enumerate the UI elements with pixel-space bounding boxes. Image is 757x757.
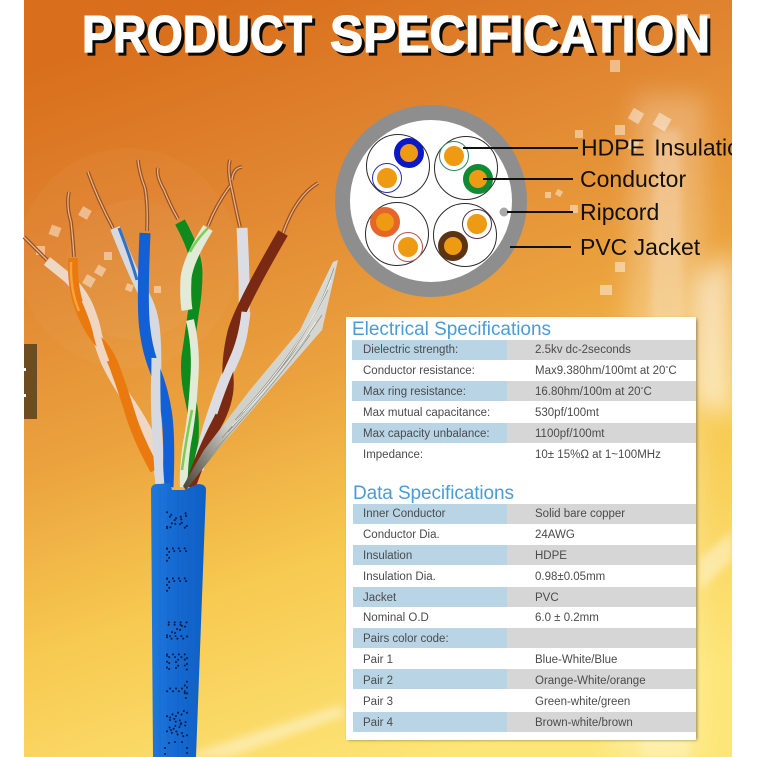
row: pair 1: Pair 1 [363, 654, 393, 666]
row: impedance: 10± 15%Ω at 1~100MHz [535, 449, 661, 461]
row: pair 1: Blue-White/Blue [535, 654, 617, 666]
panel: specifications [346, 317, 697, 740]
row: pair 2: Orange-White/orange [535, 675, 646, 687]
heading: data specifications: Data Specifications [353, 483, 514, 504]
pair 4 brown [434, 204, 496, 266]
row: conductor dia: 24AWG [535, 529, 575, 541]
row: dielectric strength [352, 340, 696, 360]
row: max mutual capacitance: Max mutual capacitance: [363, 407, 490, 419]
row: pair 1 [363, 654, 617, 666]
row: insulation dia: 0.98±0.05mm [535, 571, 605, 583]
row: pairs color code: Pairs color code: [363, 633, 449, 645]
callout: hdpe insulation: HDPE Insulation [581, 134, 753, 160]
row: max ring resistance: Max ring resistance: [363, 386, 466, 398]
row: inner conductor: Solid bare copper [535, 508, 625, 520]
row: conductor resistance: ° [665, 364, 668, 373]
dot matrix cable print: XLL NETW [160, 511, 192, 738]
pvc jacket ring [342, 112, 520, 290]
row: max capacity unbalance: Max capacity unbalance: [363, 428, 490, 440]
row: pair 3: Green-white/green [535, 696, 630, 708]
row: conductor dia: Conductor Dia. [363, 529, 440, 541]
row: inner conductor: Inner Conductor [363, 508, 446, 520]
white orange wire [47, 261, 161, 487]
blue wire [143, 233, 169, 487]
row: insulation dia [363, 571, 605, 583]
white brown wire [198, 228, 244, 470]
callout: pvc jacket: PVC Jacket [580, 234, 701, 260]
row: impedance [363, 449, 661, 461]
white blue overlap [156, 358, 160, 487]
row: impedance: Impedance: [363, 449, 423, 461]
row: conductor dia [363, 529, 575, 541]
row: insulation: HDPE [535, 550, 567, 562]
ripcord [500, 208, 508, 216]
row: pair 2: Pair 2 [363, 675, 393, 687]
white blue wire [115, 228, 161, 487]
callout: conductor: Conductor [580, 166, 686, 192]
side tab [24, 344, 37, 419]
row: max mutual capacitance: 530pf/100mt [535, 407, 600, 419]
copper conductor tips [24, 160, 318, 260]
row: insulation dia: Insulation Dia. [363, 571, 436, 583]
row: pair 2 [353, 669, 696, 689]
row: nominal od: 6.0 ± 0.2mm [535, 612, 599, 624]
brown wire [190, 233, 283, 487]
row: max capacity unbalance: 1100pf/100mt [535, 428, 605, 440]
pair 2 green [434, 136, 498, 200]
white green lower wire [184, 320, 195, 487]
row: inner conductor [353, 504, 696, 524]
cable illustration [24, 160, 338, 490]
title [82, 5, 710, 63]
orange stripe edge [154, 440, 163, 487]
row: dielectric strength: 2.5kv dc-2seconds [535, 344, 631, 356]
row: pair 3 [363, 696, 630, 708]
row: nominal od [363, 612, 599, 624]
blue stripe [119, 228, 137, 280]
row: nominal od: Nominal O.D [363, 612, 429, 624]
green wire [180, 222, 197, 487]
row: conductor resistance: Conductor resistance: [363, 365, 475, 377]
row: insulation [353, 545, 696, 565]
cut-off print dots [164, 741, 188, 755]
pair 1 blue [366, 134, 430, 198]
pair 3 orange [366, 202, 428, 266]
title: SPECIFICATION [330, 5, 710, 63]
row: pairs color code [353, 628, 696, 648]
orange wire [73, 258, 155, 470]
row: max ring resistance: C [644, 386, 652, 398]
row: conductor resistance [363, 364, 677, 377]
cross section diagram [342, 112, 520, 290]
green accents [182, 228, 208, 470]
white green wire [186, 228, 208, 310]
row: insulation: Insulation [363, 550, 412, 562]
row: max ring resistance: ° [640, 385, 644, 394]
row: pair 3: Pair 3 [363, 696, 393, 708]
row: pair 4: Pair 4 [363, 717, 394, 729]
row: jacket: PVC [535, 592, 559, 604]
orange highlight [71, 262, 79, 311]
white orange overlap [85, 300, 106, 362]
row: pair 4 [353, 712, 696, 732]
row: conductor resistance: Max9.380hm/100mt at 20 [535, 365, 665, 377]
silver shield drain [183, 260, 338, 490]
row: max mutual capacitance [363, 407, 600, 419]
row: conductor resistance: C [668, 365, 677, 377]
white brown overlap [213, 312, 246, 413]
row: jacket: Jacket [363, 592, 397, 604]
heading: electrical specifications: Electrical Specifications [352, 319, 551, 340]
row: dielectric strength: Dielectric strength: [363, 344, 458, 356]
callout: ripcord: Ripcord [580, 199, 659, 225]
row: max ring resistance [352, 381, 696, 401]
blue cable jacket [151, 483, 206, 757]
row: max capacity unbalance [352, 423, 696, 443]
row: jacket [353, 587, 696, 607]
row: max ring resistance: 16.80hm/100m at 20 [535, 386, 640, 398]
row: pair 4: Brown-white/brown [535, 717, 633, 729]
title: PRODUCT [82, 5, 312, 63]
